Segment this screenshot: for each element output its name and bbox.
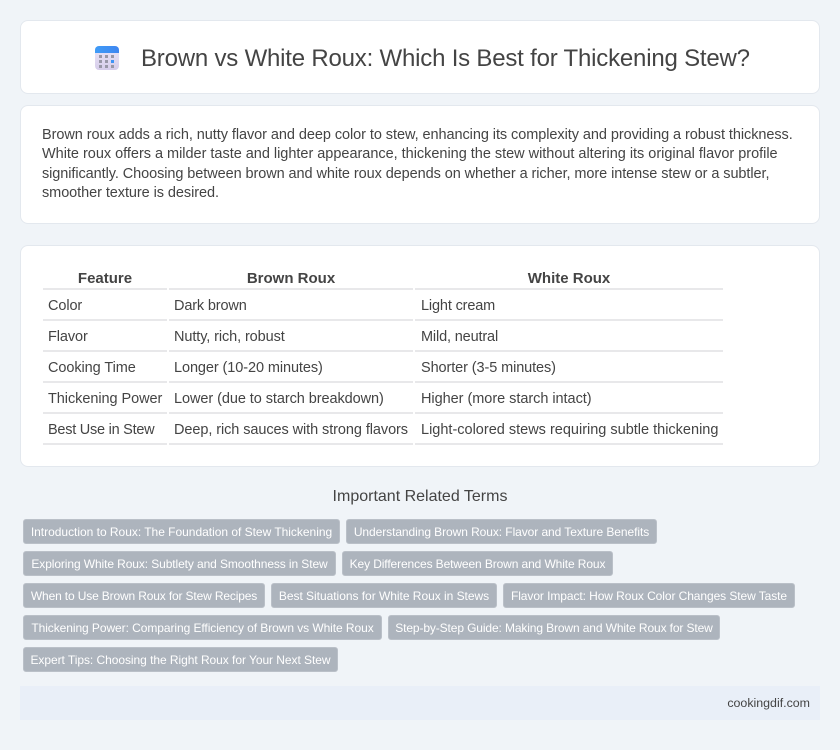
related terms tags: Expert Tips: Choosing the Right Roux for Your Next Stew: [30, 653, 331, 667]
icon: calendar: [95, 46, 119, 70]
footer: [20, 686, 820, 720]
related terms tags: When to Use Brown Roux for Stew Recipes: [31, 589, 257, 603]
comparison table: Color: [48, 298, 82, 314]
panel: comparison table: [20, 245, 820, 467]
related terms tags: [23, 519, 795, 672]
comparison table: Flavor: [48, 329, 88, 345]
related terms tags: Flavor Impact: How Roux Color Changes Stew Taste: [511, 589, 787, 603]
comparison table: Higher (more starch intact): [421, 391, 592, 407]
related terms tags: Key Differences Between Brown and White Roux: [350, 557, 605, 571]
comparison table: Deep, rich sauces with strong flavors: [174, 422, 408, 438]
comparison table: Nutty, rich, robust: [174, 329, 285, 345]
comparison table: Cooking Time: [48, 360, 136, 376]
comparison table: Lower (due to starch breakdown): [174, 391, 384, 407]
summary text: White roux offers a milder taste and lighter appearance, thickening the stew without altering its original flavor profile: [42, 146, 778, 162]
heading: related terms: Important Related Terms: [333, 488, 507, 505]
comparison table: [43, 270, 723, 445]
comparison table: Light cream: [421, 298, 495, 314]
comparison table: White Roux: [528, 270, 610, 287]
related terms tags: Best Situations for White Roux in Stews: [279, 589, 489, 603]
title: Brown vs White Roux: Which Is Best for Thickening Stew?: [141, 45, 750, 72]
related terms tags: Understanding Brown Roux: Flavor and Texture Benefits: [354, 525, 649, 539]
related terms tags: Exploring White Roux: Subtlety and Smoothness in Stew: [31, 557, 328, 571]
comparison table: Shorter (3-5 minutes): [421, 360, 556, 376]
comparison table: Best Use in Stew: [48, 422, 154, 438]
related terms tags: Step-by-Step Guide: Making Brown and White Roux for Stew: [395, 621, 713, 635]
summary text: smoother texture is desired.: [42, 185, 219, 201]
related terms tags: Introduction to Roux: The Foundation of Stew Thickening: [31, 525, 332, 539]
comparison table: Dark brown: [174, 298, 247, 314]
comparison table: Mild, neutral: [421, 329, 498, 345]
comparison table: Light-colored stews requiring subtle thickening: [421, 422, 718, 438]
comparison table: Longer (10-20 minutes): [174, 360, 323, 376]
comparison table: Brown Roux: [247, 270, 335, 287]
related terms tags: Thickening Power: Comparing Efficiency of Brown vs White Roux: [31, 621, 374, 635]
comparison table: Thickening Power: [48, 391, 162, 407]
comparison table: Feature: [78, 270, 132, 287]
source: cookingdif.com: [727, 696, 810, 710]
summary text: Brown roux adds a rich, nutty flavor and deep color to stew, enhancing its complexity and providing a robust thickness.: [42, 127, 793, 143]
panel: summary: [20, 105, 820, 224]
panel: header: [20, 20, 820, 94]
summary text: significantly. Choosing between brown and white roux depends on whether a richer, more intense stew or a subtler,: [42, 166, 769, 182]
summary text: [42, 127, 793, 201]
